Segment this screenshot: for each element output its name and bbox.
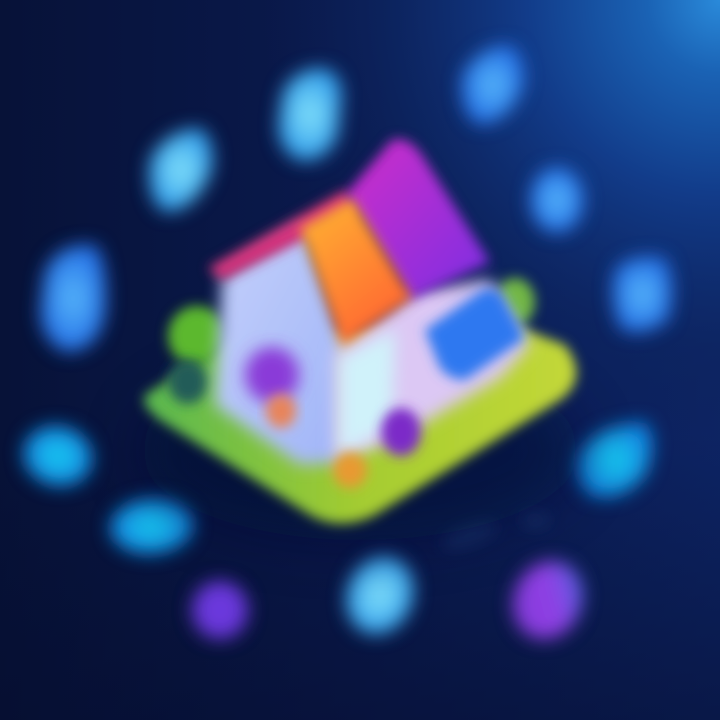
icon: bottom centre tile [335, 546, 425, 644]
icon: upper left tile [149, 128, 213, 212]
icon: top centre tile [278, 68, 342, 161]
floating icons ring [16, 45, 672, 651]
house right wall [335, 280, 530, 462]
icon: bottom violet tile [192, 581, 248, 639]
icon: left tile [40, 245, 106, 352]
purple door [245, 347, 299, 403]
house on lawn [140, 139, 580, 540]
icon: green bush left [168, 306, 226, 366]
shadow under lawn [140, 360, 580, 540]
magenta roof edge [208, 190, 358, 280]
icon: lower left tile [16, 418, 100, 494]
icon: bottom right purple tile [500, 549, 596, 651]
icon: top right tile [461, 45, 524, 125]
pale front highlight [340, 330, 395, 455]
orange roof panel [300, 198, 412, 346]
blue panel [425, 289, 525, 380]
house left wall [215, 225, 345, 465]
orange window [266, 394, 296, 428]
icon: bottom left cyan tile [108, 494, 196, 558]
orange ball [333, 452, 367, 488]
dark shrub base [168, 360, 208, 404]
icon: right tile [612, 256, 672, 332]
lawn platform [144, 320, 576, 524]
icon: lower right tile [576, 422, 652, 498]
icon: green bush right [495, 278, 535, 326]
purple ball [381, 408, 421, 456]
icon: upper right tile [530, 167, 584, 233]
purple roof panel [345, 139, 490, 300]
faint dark marks below house [438, 512, 551, 555]
